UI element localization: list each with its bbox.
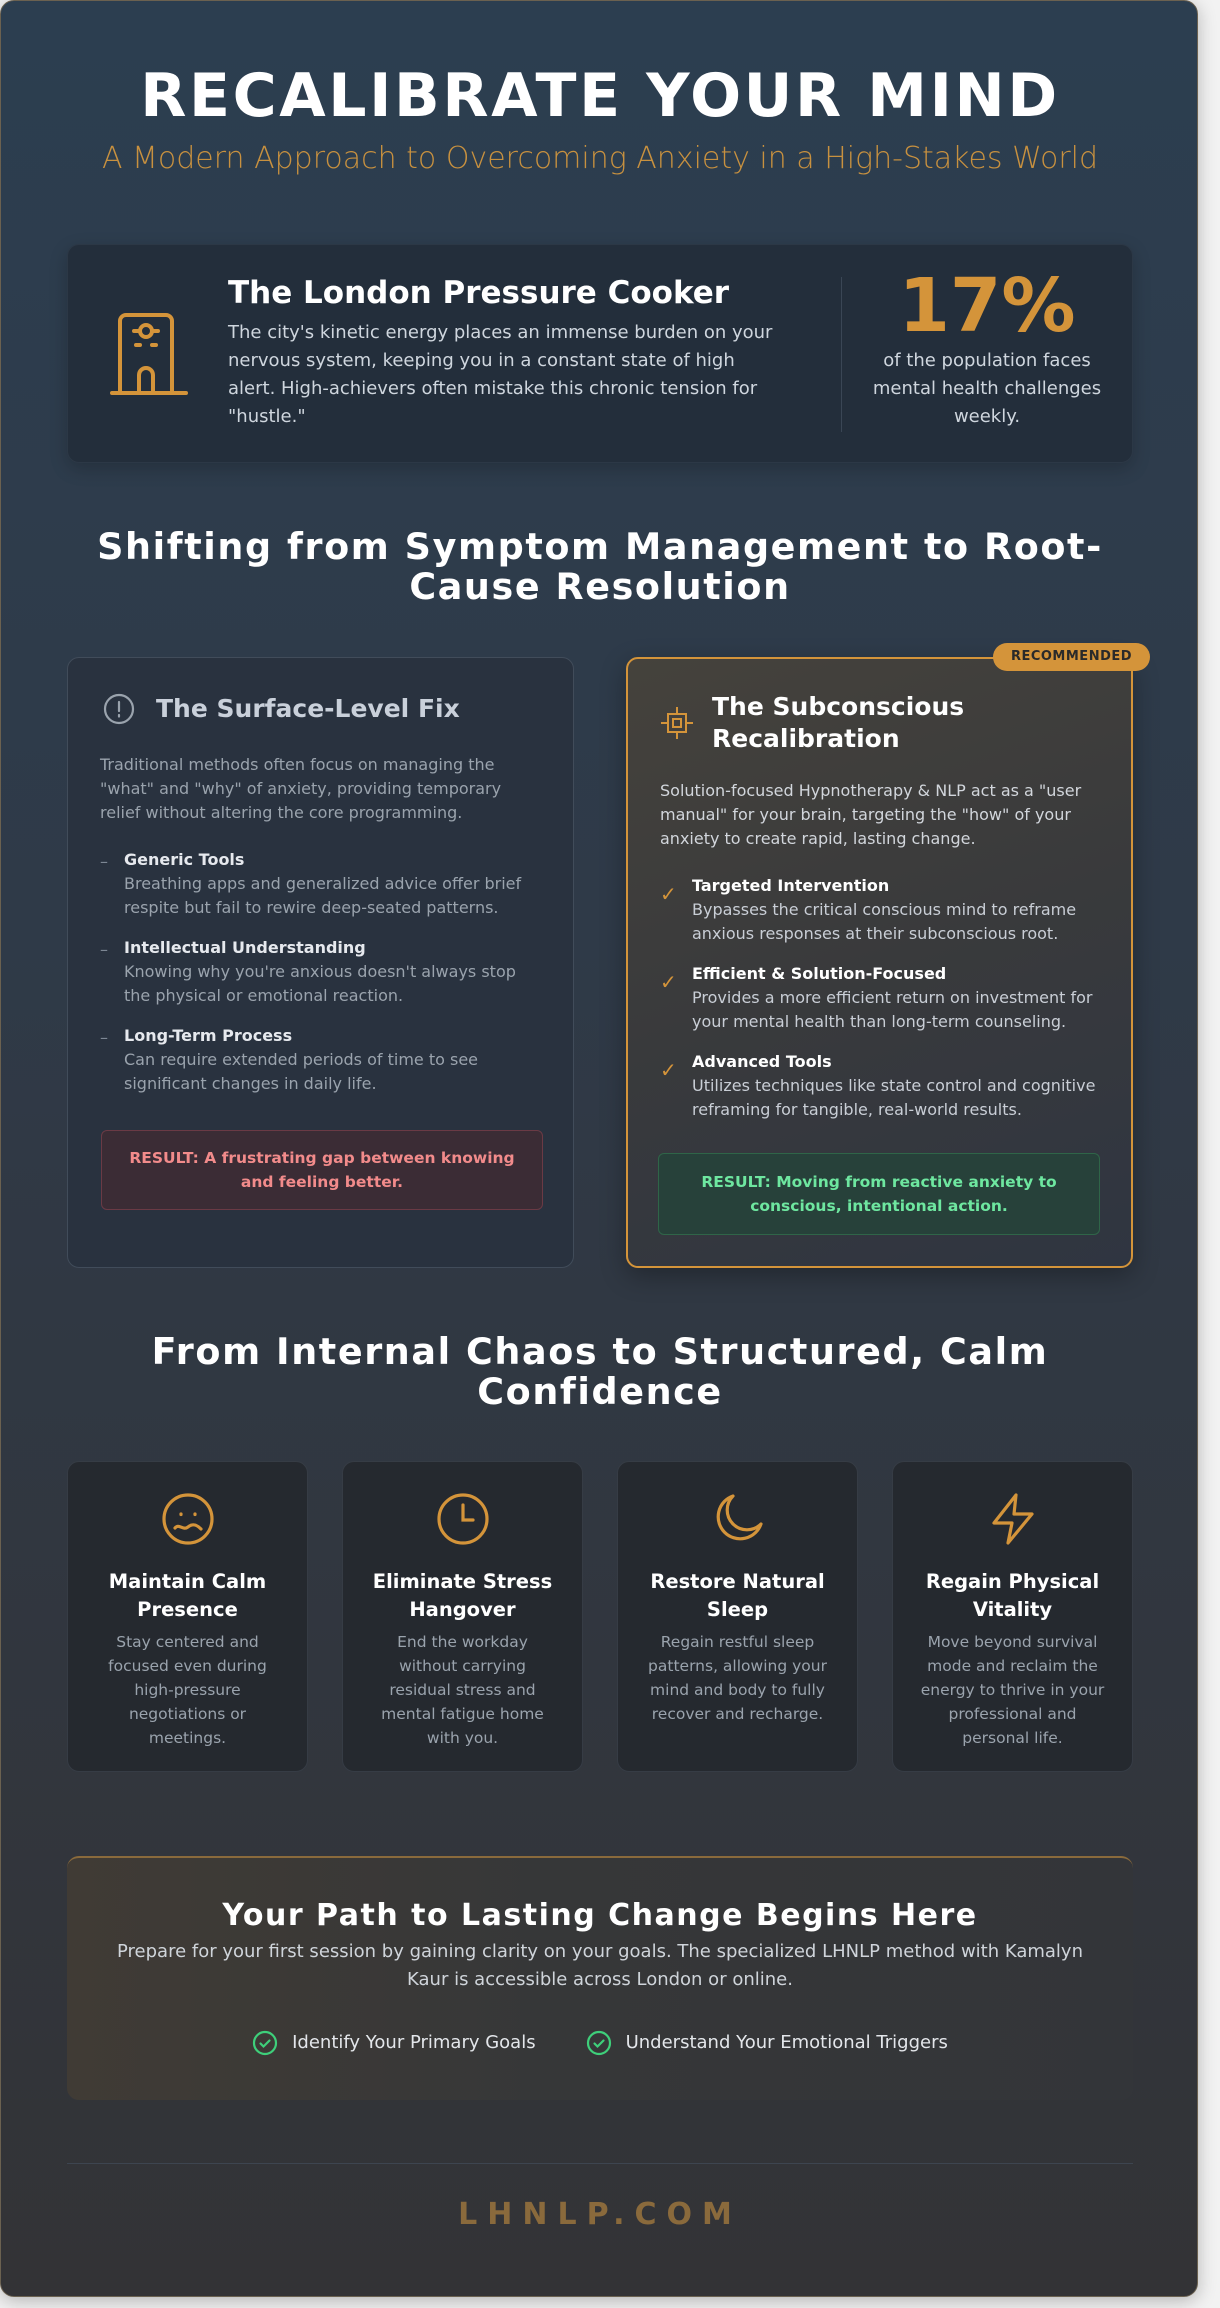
panel: benefit stress hangover: End the workday without carrying residual stress and mental fatigue home with you. — [381, 1633, 544, 1747]
list: surface items: – — [100, 1028, 108, 1047]
icon: alert — [104, 694, 134, 724]
list: subconscious items: Utilizes techniques like state control and cognitive reframing for tangible, real-world results. — [692, 1076, 1095, 1119]
text: cta body: Prepare for your first session by gaining clarity on your goals. The specialized LHNLP method with Kamalyn Kaur is accessible across London or online. — [117, 1941, 1083, 1990]
list: subconscious items: Efficient & Solution-Focused — [692, 964, 946, 983]
panel: benefit sleep — [617, 1461, 858, 1772]
panel: benefit stress hangover — [342, 1461, 583, 1772]
heading: surface: The Surface-Level Fix — [156, 694, 460, 723]
heading: subconscious: Recalibration — [712, 724, 900, 753]
heading: subconscious: The Subconscious — [712, 692, 964, 721]
list: surface items: Intellectual Understanding — [124, 938, 366, 957]
panel: surface-level fix — [67, 657, 574, 1268]
callout: surface result — [101, 1130, 543, 1210]
list: surface items: Long-Term Process — [124, 1026, 292, 1045]
list: surface items: Can require extended periods of time to see significant changes in daily life. — [124, 1050, 478, 1093]
panel: benefit calm presence: Maintain Calm Presence — [109, 1570, 266, 1621]
panel: london pressure cooker — [67, 244, 1133, 463]
badge: recommended: RECOMMENDED — [1011, 649, 1132, 664]
list: cta checks — [252, 2030, 948, 2056]
list: subconscious items: Advanced Tools — [692, 1052, 832, 1071]
heading: chaos to calm: From Internal Chaos to Structured, Calm — [152, 1330, 1048, 1373]
heading: london: The London Pressure Cooker — [228, 275, 729, 311]
title: RECALIBRATE YOUR MIND — [140, 61, 1060, 131]
panel: benefit calm presence: Stay centered and focused even during high-pressure negotiations or meetings. — [108, 1633, 267, 1747]
callout: subconscious result: RESULT: Moving from reactive anxiety to — [701, 1173, 1057, 1191]
panel: benefit sleep: Regain restful sleep patterns, allowing your mind and body to fully recover and recharge. — [648, 1633, 827, 1723]
callout: subconscious result: conscious, intentional action. — [750, 1197, 1008, 1215]
list: subconscious items: Targeted Intervention — [692, 876, 889, 895]
callout: surface result: and feeling better. — [241, 1173, 403, 1191]
panel: benefit vitality: Move beyond survival mode and reclaim the energy to thrive in your professional and personal life. — [921, 1633, 1104, 1747]
icon: moon — [716, 1494, 763, 1540]
stat: 17% — [873, 263, 1101, 427]
panel: benefit vitality: Regain Physical Vitality — [926, 1570, 1099, 1621]
list: surface items — [100, 850, 522, 1093]
list: subconscious items: ✓ — [660, 970, 677, 994]
text: subconscious intro: Solution-focused Hypnotherapy & NLP act as a "user manual" for your brain, targeting the "how" of your anxiety to create rapid, lasting change. — [660, 781, 1081, 848]
heading: path: Your Path to Lasting Change Begins Here — [222, 1898, 978, 1933]
list: cta checks: Understand Your Emotional Triggers — [626, 2032, 948, 2053]
panel: benefit stress hangover: Eliminate Stress Hangover — [373, 1570, 552, 1621]
list: surface items: Breathing apps and generalized advice offer brief respite but fail to rewire deep-seated patterns. — [124, 874, 521, 917]
icon: face — [162, 1493, 214, 1545]
subtitle: A Modern Approach to Overcoming Anxiety in a High-Stakes World — [102, 141, 1098, 176]
text: surface intro: Traditional methods often focus on managing the "what" and "why" of anxiety, providing temporary relief without altering the core programming. — [100, 755, 501, 822]
heading: chaos to calm: Confidence — [477, 1370, 723, 1413]
callout: surface result: RESULT: A frustrating gap between knowing — [129, 1149, 515, 1167]
heading: subconscious — [712, 692, 964, 753]
list: cta checks: Identify Your Primary Goals — [292, 2032, 536, 2053]
icon: building — [110, 313, 188, 395]
heading: shifting: Cause Resolution — [409, 565, 791, 608]
icon: clock — [437, 1493, 489, 1545]
callout: subconscious result — [658, 1153, 1100, 1235]
icon: lightning — [992, 1493, 1034, 1545]
badge: recommended — [993, 643, 1150, 671]
list: subconscious items — [660, 876, 1095, 1119]
panel: benefit calm presence — [67, 1461, 308, 1772]
footer: website: LHNLP.COM — [458, 2197, 742, 2232]
stat: 17%: 17% — [898, 263, 1076, 349]
list: subconscious items: Provides a more efficient return on investment for your mental health than long-term counseling. — [692, 988, 1092, 1031]
heading: shifting: Shifting from Symptom Management to Root- — [97, 525, 1103, 568]
list: surface items: – — [100, 852, 108, 871]
icon: chip — [661, 707, 693, 739]
list: subconscious items: ✓ — [660, 1058, 677, 1082]
list: surface items: Generic Tools — [124, 850, 244, 869]
stat: 17%: of the population faces mental health challenges weekly. — [873, 350, 1101, 427]
list: surface items: – — [100, 940, 108, 959]
list: subconscious items: Bypasses the critical conscious mind to reframe anxious responses at their subconscious root. — [692, 900, 1076, 943]
panel: benefit vitality — [892, 1461, 1133, 1772]
panel: call to action — [67, 1856, 1133, 2100]
list: surface items: Knowing why you're anxious doesn't always stop the physical or emotional reaction. — [124, 962, 516, 1005]
list: subconscious items: ✓ — [660, 882, 677, 906]
panel: benefit sleep: Restore Natural Sleep — [650, 1570, 825, 1621]
heading: chaos to calm — [152, 1330, 1048, 1413]
panel: subconscious recalibration — [626, 657, 1133, 1268]
text: london body: The city's kinetic energy places an immense burden on your nervous system, keeping you in a constant state of high alert. High-achievers often mistake this chronic tension for "hustle." — [228, 322, 772, 427]
heading: shifting — [97, 525, 1103, 608]
